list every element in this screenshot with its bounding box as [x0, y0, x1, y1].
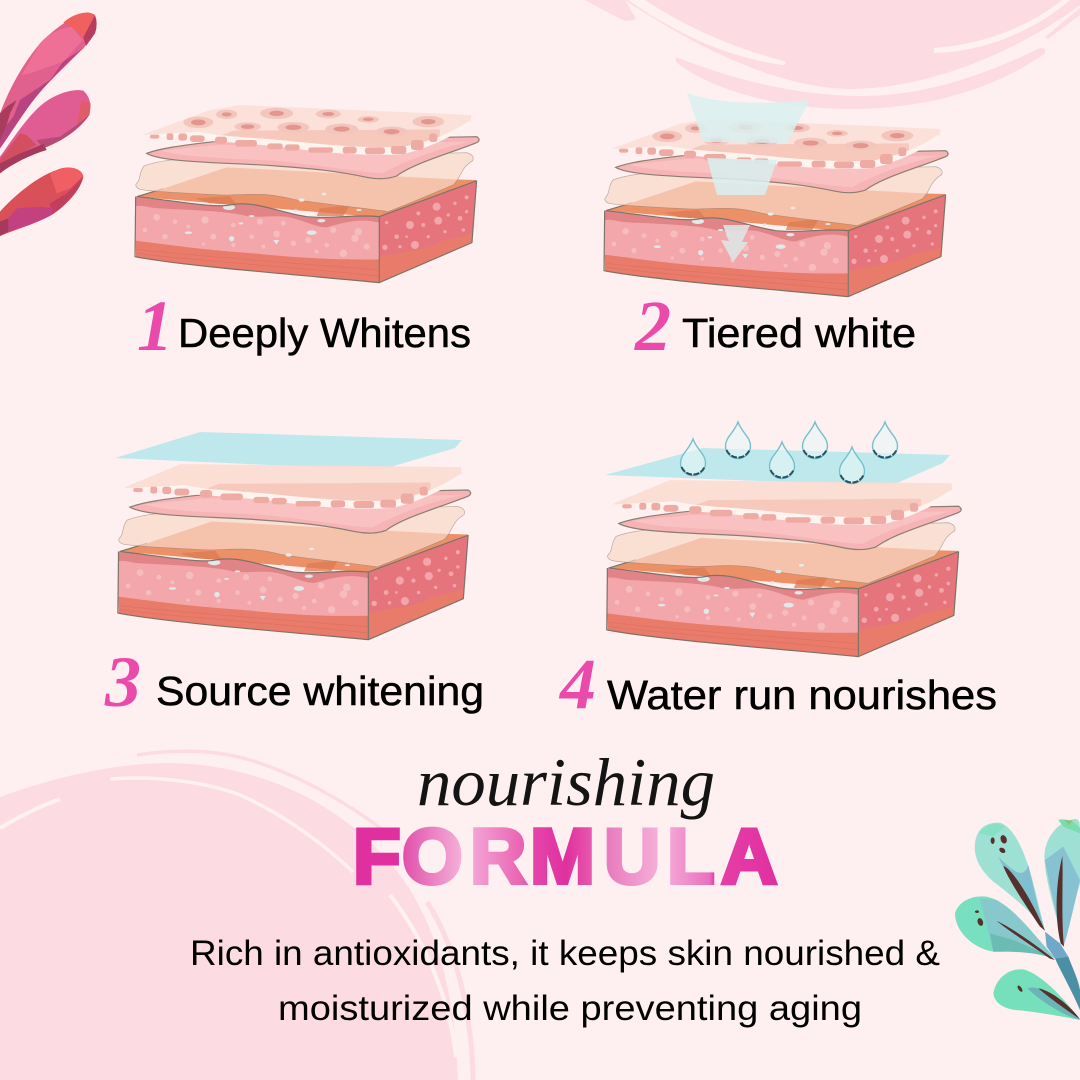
number 1: 1 — [137, 286, 173, 366]
blue film layer — [115, 432, 462, 470]
description text — [190, 934, 940, 1028]
panel 4: water run nourishes — [558, 422, 997, 724]
decorative blob: bottom left — [0, 751, 473, 1080]
number 3: 3 — [104, 642, 141, 722]
title: formula: FORMULA — [353, 812, 777, 900]
label: tiered white: Tiered white — [682, 310, 916, 356]
decorative blob: top right — [585, 0, 1080, 109]
description text: moisturized while preventing aging — [278, 989, 862, 1028]
icon: light beam and down arrow — [687, 93, 810, 262]
label: source whitening: Source whitening — [156, 668, 484, 714]
skin layers illustration 4 — [607, 480, 961, 657]
blue film layer — [605, 448, 950, 486]
panel 1: deeply whitens — [135, 105, 479, 366]
icon: water drops — [680, 422, 898, 484]
description text: Rich in antioxidants, it keeps skin nourished & — [190, 934, 940, 973]
label: deeply whitens: Deeply Whitens — [178, 310, 471, 356]
skin layers illustration 2 — [604, 119, 948, 297]
skin layers illustration 1 — [135, 105, 479, 283]
icon: teal leaves bottom right — [955, 819, 1080, 1020]
number 4: 4 — [558, 644, 596, 724]
title: nourishing: nourishing — [417, 744, 715, 820]
icon: red leaves top left — [0, 12, 97, 236]
skin layers illustration 3 — [118, 464, 471, 640]
number 2: 2 — [634, 286, 671, 366]
panel 2: tiered white — [604, 93, 948, 366]
panel 3: source whitening — [104, 432, 484, 722]
label: water run nourishes: Water run nourishes — [607, 672, 997, 718]
